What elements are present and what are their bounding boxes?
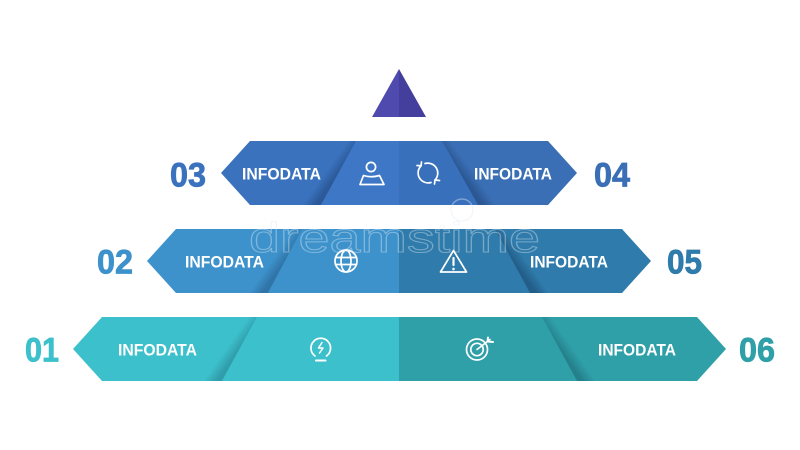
watermark: dreamstime — [249, 214, 540, 261]
panel: centre right — [399, 317, 577, 381]
panel: left arrow 03: INFODATA — [242, 166, 321, 184]
tier 3: top band — [221, 141, 577, 205]
number 01: 01 — [25, 332, 59, 370]
panel: right arrow 06: INFODATA — [598, 342, 676, 360]
number 02: 02 — [97, 244, 133, 282]
panel: left arrow 03 — [221, 141, 360, 205]
tier 2: middle band — [147, 229, 651, 293]
panel: centre left — [321, 141, 399, 205]
pyramid apex triangle — [372, 69, 426, 117]
number 04: 04 — [594, 156, 630, 194]
panel: centre left — [222, 317, 399, 381]
panel: left arrow 02: INFODATA — [185, 254, 264, 272]
number 05: 05 — [667, 244, 702, 282]
panel: left arrow 01 — [73, 317, 260, 381]
tier 1: bottom band — [73, 317, 726, 381]
number 06: 06 — [739, 332, 775, 370]
icon: warning triangle — [440, 250, 466, 272]
panel: left arrow 02 — [147, 229, 305, 293]
panel: centre right — [399, 229, 530, 293]
watermark — [249, 199, 540, 261]
icon: globe — [335, 250, 357, 272]
panel: right arrow 06 — [540, 317, 726, 381]
icon: target with arrow — [466, 338, 493, 360]
icon: refresh cycle — [417, 162, 440, 184]
panel: right arrow 05 — [490, 229, 651, 293]
icon: person on map — [360, 162, 384, 184]
panel: centre left — [268, 229, 399, 293]
panel: right arrow 04: INFODATA — [474, 166, 552, 184]
panel: left arrow 01: INFODATA — [118, 342, 197, 360]
panel: centre right — [399, 141, 478, 205]
panel: right arrow 05: INFODATA — [530, 254, 608, 272]
icon: light bulb with bolt — [311, 338, 331, 360]
panel: right arrow 04 — [440, 141, 577, 205]
number 03: 03 — [170, 156, 206, 194]
